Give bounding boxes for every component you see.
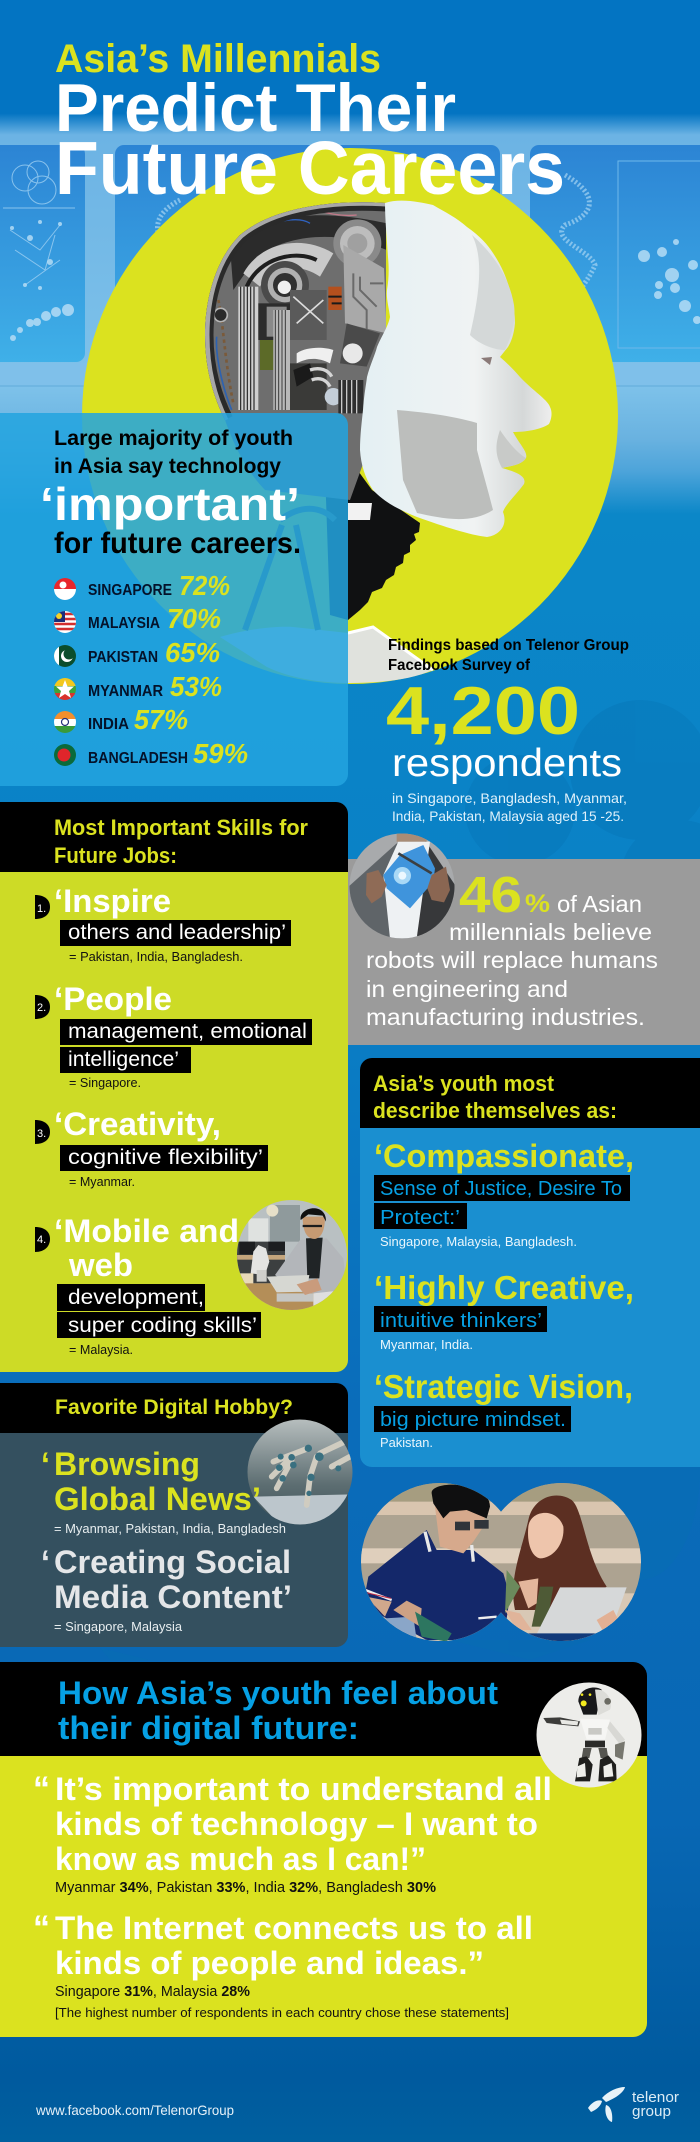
title (55, 37, 565, 210)
robot neck supports under the panel (245, 457, 335, 630)
skill 3: 3. (37, 1128, 46, 1140)
skill 3: ‘Creativity, (54, 1106, 221, 1142)
quote: internet connects: The Internet connects us to all (55, 1910, 533, 1946)
robot face (360, 201, 552, 537)
row: Malaysia (54, 608, 220, 633)
panel: technology important (0, 413, 348, 786)
trait: compassionate: Sense of Justice, Desire To (380, 1178, 622, 1200)
skill 3: = Myanmar. (69, 1174, 135, 1189)
hobby: browsing global news: Global News’ (54, 1481, 261, 1517)
stat: 46 percent (366, 866, 658, 1030)
stat: 46 percent: in engineering and (366, 976, 568, 1002)
trait: highly creative: intuitive thinkers’ (380, 1310, 542, 1332)
robot neck (325, 457, 420, 620)
panel: youth describe themselves (360, 1058, 700, 1467)
trait: strategic vision: big picture mindset. (380, 1409, 566, 1431)
quote: understand technology: “ (33, 1770, 50, 1808)
stat: 46 percent: % (525, 890, 550, 918)
row: Singapore (54, 576, 230, 600)
skill 2: 2. (37, 1002, 46, 1014)
heading: youth describe: describe themselves as: (373, 1098, 617, 1123)
heading: skills: Most Important Skills for (54, 815, 308, 840)
skill 4: 4. (37, 1234, 46, 1246)
logo: telenor group: group (632, 2103, 671, 2120)
panel: favorite digital hobby (0, 1383, 357, 1647)
row: Bangladesh: BANGLADESH (88, 750, 188, 767)
survey findings: in Singapore, Bangladesh, Myanmar, (392, 790, 627, 806)
trait: strategic vision (374, 1368, 633, 1450)
row: India (54, 710, 188, 733)
skill 1 (35, 883, 291, 964)
skill 4: super coding skills’ (68, 1314, 257, 1337)
row: Myanmar: MYANMAR (88, 683, 163, 700)
hobby: browsing global news: ‘ (41, 1446, 50, 1482)
heading: large majority: ‘important’ (40, 478, 300, 530)
row: Singapore: SINGAPORE (88, 582, 172, 599)
stat: 46 percent: millennials believe (449, 919, 652, 945)
row: Pakistan: 65% (165, 637, 220, 668)
quote: understand technology: It’s important to understand all (55, 1771, 552, 1807)
trait: compassionate: Singapore, Malaysia, Bangladesh. (380, 1234, 577, 1249)
stat: 46 percent: robots will replace humans (366, 947, 658, 973)
title: Future Careers (55, 126, 565, 210)
photo: two students with laptop (357, 1480, 647, 1647)
survey findings: Facebook Survey of (388, 657, 531, 674)
quote: understand technology: kinds of technology – I want to (55, 1806, 538, 1842)
panel: most important skills (0, 802, 348, 1372)
skill 4: = Malaysia. (69, 1342, 133, 1357)
footer url: www.facebook.com/TelenorGroup (35, 2102, 234, 2118)
heading: large majority (40, 427, 301, 560)
trait: compassionate: Protect:’ (380, 1207, 460, 1229)
row: Myanmar (54, 676, 222, 700)
trait: strategic vision: Pakistan. (380, 1435, 433, 1450)
stat: 46 percent: of Asian (557, 891, 642, 917)
logo: telenor group (588, 2087, 679, 2122)
hobby: creating social media content: Media Content’ (54, 1579, 292, 1615)
panel: digital future (0, 1662, 647, 2037)
hobby: creating social media content: = Singapore, Malaysia (54, 1619, 183, 1634)
row: Pakistan: PAKISTAN (88, 649, 158, 666)
skill 1: = Pakistan, India, Bangladesh. (69, 949, 243, 964)
row: India: INDIA (88, 716, 129, 733)
heading: digital future (58, 1675, 498, 1746)
survey findings: Findings based on Telenor Group (388, 637, 629, 654)
skill 3: cognitive flexibility’ (68, 1146, 263, 1169)
skill 3 (35, 1106, 268, 1189)
skill 1: ‘Inspire (54, 883, 171, 919)
heading: digital future: their digital future: (58, 1710, 359, 1746)
photo: robot hand on keyboard (247, 1418, 357, 1528)
trait: compassionate: ‘Compassionate, (374, 1138, 634, 1174)
skill 2 (35, 981, 312, 1090)
skill 2: ‘People (54, 981, 172, 1017)
row: Bangladesh: 59% (193, 738, 248, 769)
quote: internet connects (33, 1909, 533, 2020)
row: Pakistan (54, 642, 220, 667)
skill 4: development, (68, 1286, 204, 1309)
yellow circle (82, 148, 618, 684)
row: Myanmar: 53% (170, 671, 222, 702)
quote: internet connects: Singapore 31%, Malaysia 28% (55, 1984, 250, 2000)
skill 2: intelligence’ (68, 1048, 179, 1071)
heading: skills: Future Jobs: (54, 843, 177, 868)
hobby: creating social media content: ‘ (41, 1544, 50, 1580)
photo: man with tablet in office (235, 1198, 348, 1312)
stat: 46 percent: manufacturing industries. (366, 1004, 645, 1030)
row: India: 57% (134, 704, 188, 735)
heading: large majority: in Asia say technology (54, 455, 281, 478)
skill 1: others and leadership’ (68, 921, 286, 944)
robot shoulder (220, 627, 433, 683)
photo: small robot (535, 1681, 643, 1790)
trait: highly creative (374, 1269, 634, 1352)
heading: youth describe: Asia’s youth most (373, 1071, 555, 1096)
robot mechanical brain (205, 202, 386, 500)
heading: digital future: How Asia’s youth feel about (58, 1675, 498, 1711)
quote: internet connects: [The highest number of respondents in each country chose these statements] (55, 2005, 509, 2020)
title: Predict Their (55, 70, 456, 146)
row: Bangladesh (54, 744, 248, 766)
heading: youth describe (373, 1071, 617, 1123)
trait: highly creative: ‘Highly Creative, (374, 1269, 634, 1306)
panel: 46 percent robots (330, 832, 700, 1045)
trait: highly creative: Myanmar, India. (380, 1337, 473, 1352)
hobby: browsing global news: = Myanmar, Pakistan, India, Bangladesh (54, 1521, 286, 1536)
stat: 46 percent: 46 (459, 866, 522, 923)
survey findings: India, Pakistan, Malaysia aged 15 -25. (392, 808, 624, 824)
skill 4 (35, 1213, 261, 1357)
row: Singapore: 72% (179, 570, 230, 601)
skill 2: management, emotional (68, 1020, 307, 1043)
survey findings (386, 637, 629, 824)
hobby: creating social media content: Creating Social (54, 1544, 291, 1580)
trait: strategic vision: ‘Strategic Vision, (374, 1368, 633, 1405)
face shading (397, 410, 493, 519)
survey findings: 4,200 (386, 673, 580, 749)
quote: internet connects: “ (33, 1909, 50, 1947)
heading: large majority: for future careers. (54, 527, 301, 560)
title: Asia’s Millennials (55, 37, 381, 81)
heading: large majority: Large majority of youth (54, 427, 293, 450)
quote: internet connects: kinds of people and ideas.” (55, 1945, 484, 1981)
skill 4: ‘Mobile and (54, 1213, 239, 1249)
robot head illustration (200, 190, 552, 683)
quote: understand technology: Myanmar 34%, Pakistan 33%, India 32%, Bangladesh 30% (55, 1880, 436, 1896)
quote: understand technology (33, 1770, 552, 1896)
skill 4: web (68, 1247, 133, 1283)
heading: skills (54, 815, 308, 868)
row: Malaysia: 70% (167, 603, 221, 634)
logo: telenor group: telenor (632, 2089, 679, 2106)
photo: businessman opening shirt (347, 832, 457, 942)
survey findings: respondents (392, 742, 622, 785)
skill 2: = Singapore. (69, 1075, 141, 1090)
row: Malaysia: MALAYSIA (88, 615, 160, 632)
hobby: browsing global news: Browsing (54, 1446, 200, 1482)
trait: compassionate (374, 1138, 634, 1249)
hobby: browsing global news (41, 1446, 286, 1536)
heading: hobby: Favorite Digital Hobby? (55, 1396, 293, 1419)
quote: understand technology: know as much as I can!” (55, 1841, 426, 1877)
skill 1: 1. (37, 903, 46, 915)
hobby: creating social media content (41, 1544, 292, 1634)
